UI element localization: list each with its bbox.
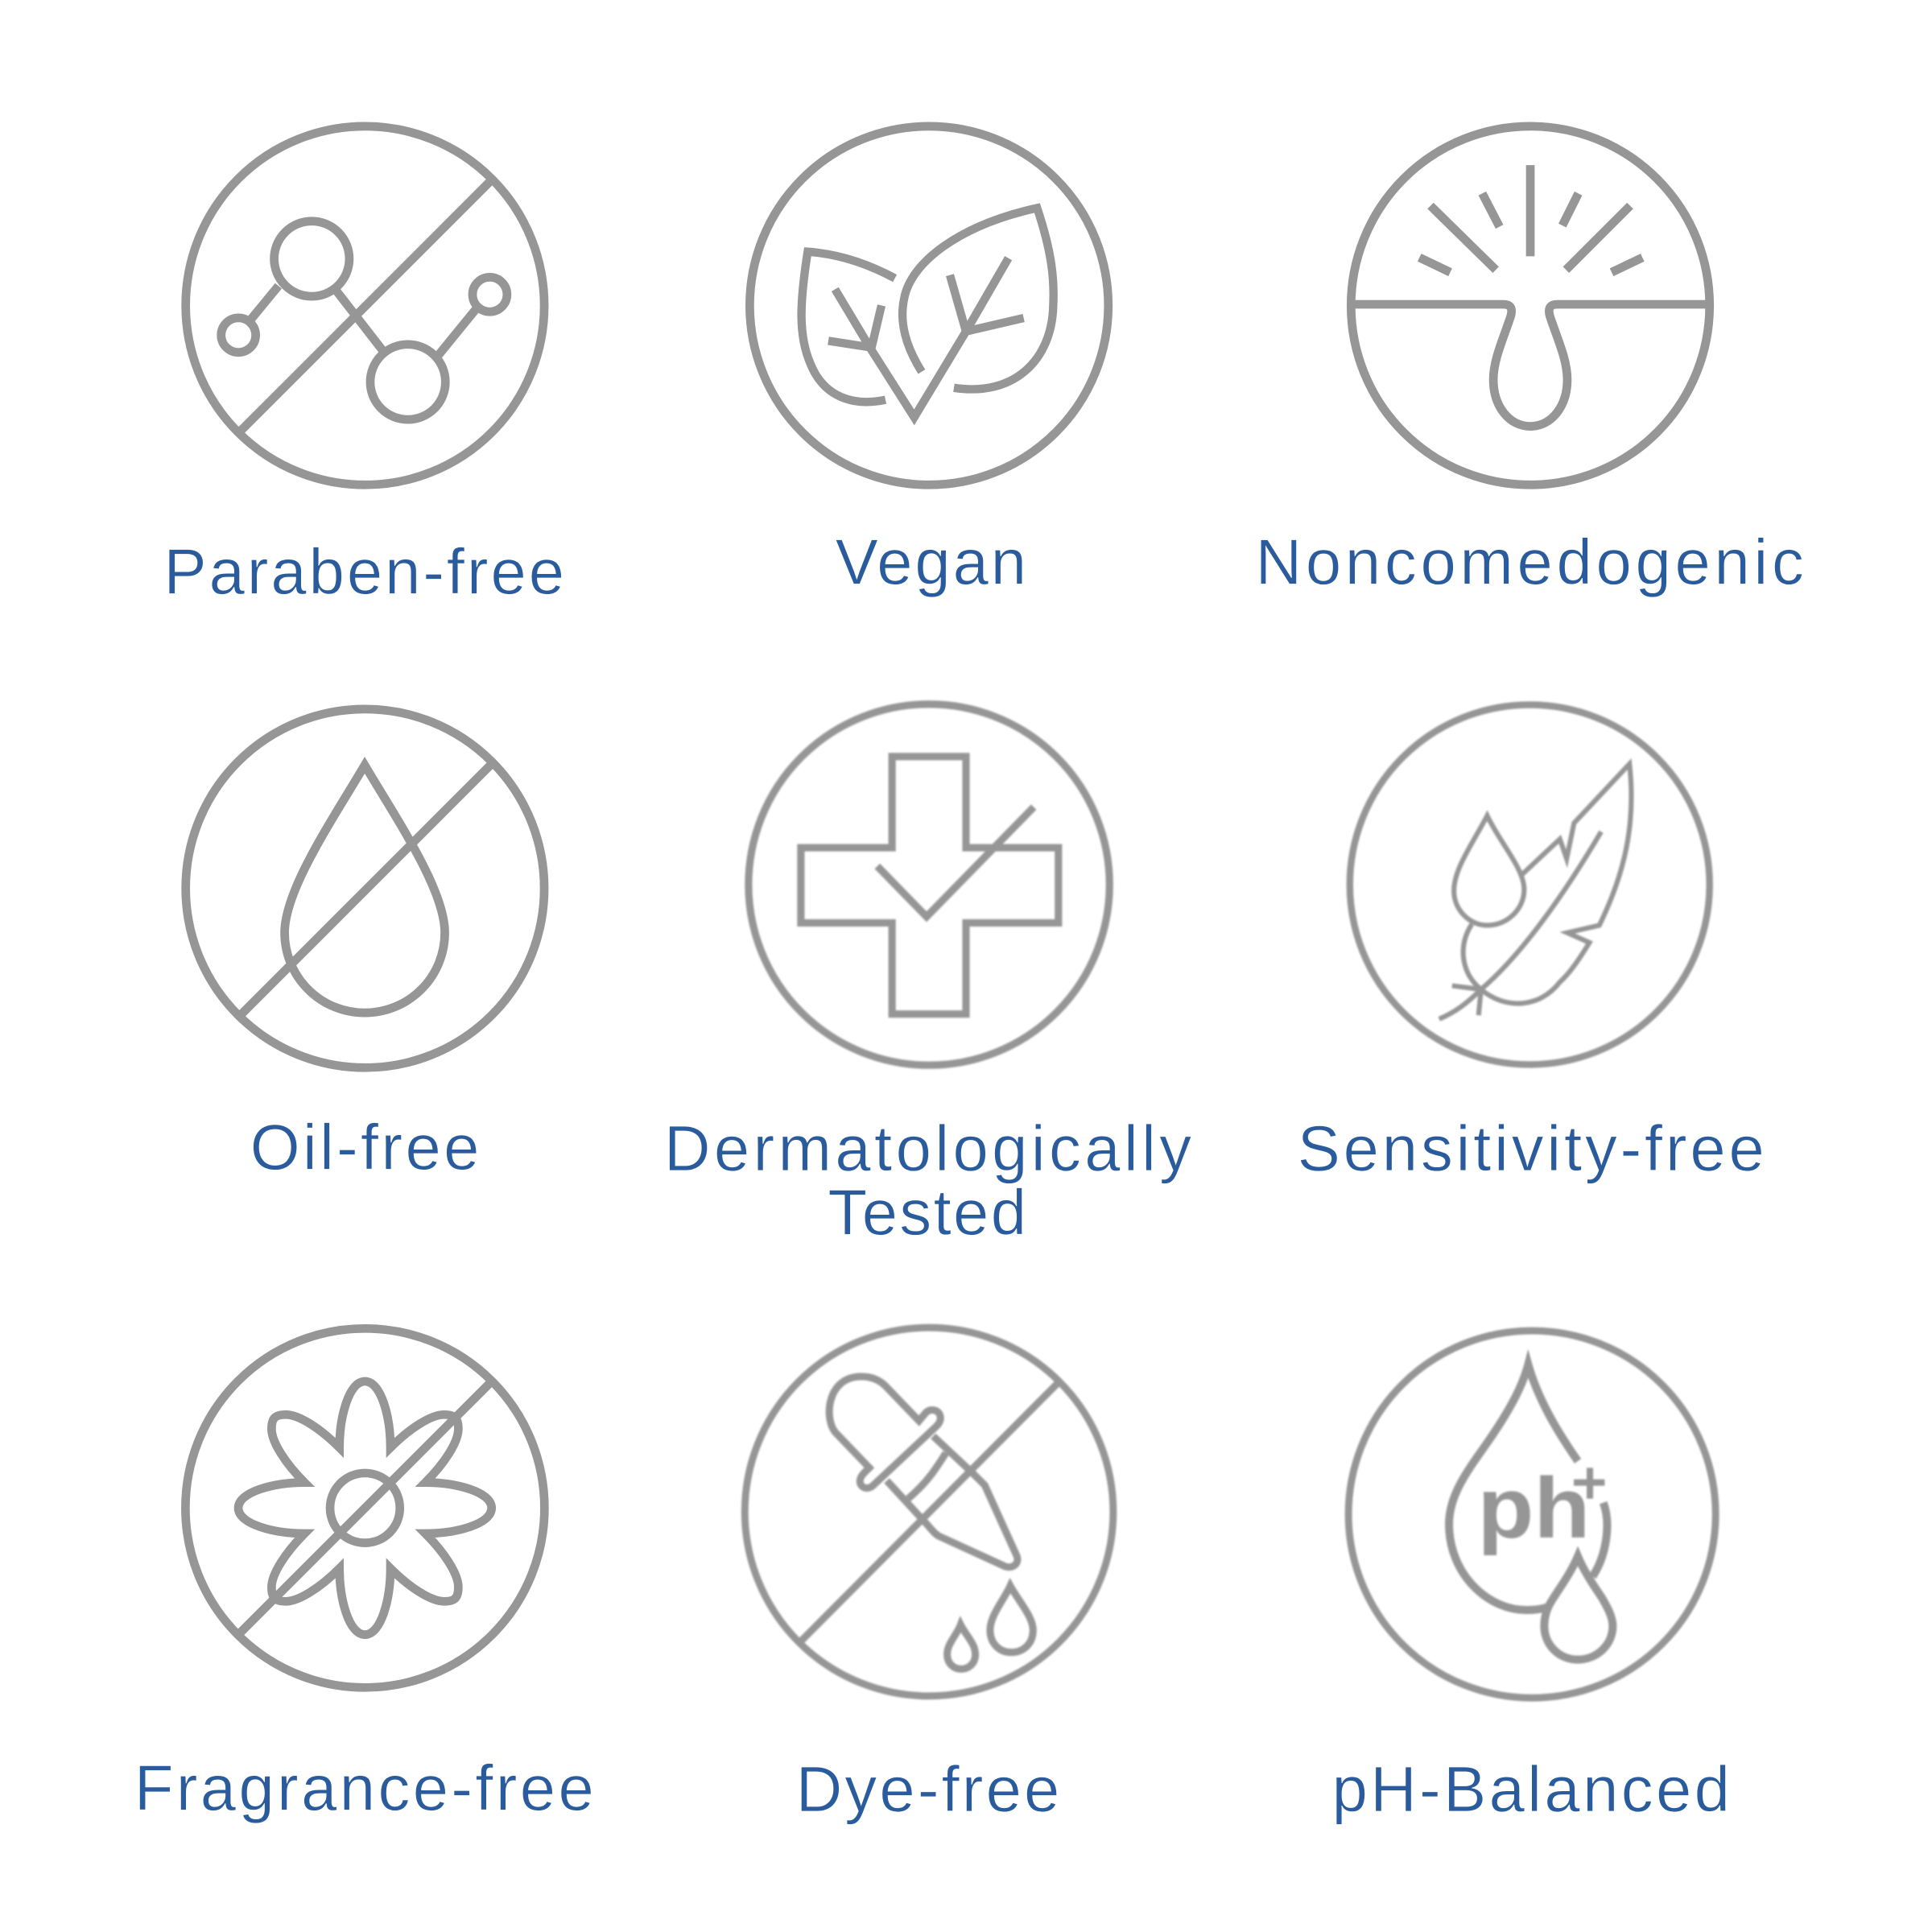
label: Dye-free: Dye-free [796,1753,1059,1825]
label: Vegan: Vegan [836,526,1026,598]
icon: dye-free dropper [745,1327,1113,1696]
icon: vegan leaves [749,126,1108,485]
label: Paraben-free: Paraben-free [164,536,564,608]
label: Sensitivity-free: Sensitivity-free [1298,1113,1765,1184]
label: Dermatologically Tested: Tested [828,1177,1026,1249]
icon: sensitivity-free feather and drop [1350,705,1710,1064]
label: Noncomedogenic: Noncomedogenic [1256,526,1804,598]
icon: noncomedogenic pore [1351,126,1710,485]
label: Dermatologically Tested [664,1113,1191,1249]
icon: dermatologically tested cross [749,704,1109,1065]
icon: pH-balanced drop [1348,1331,1715,1698]
icon: pH-balanced drop: ph [1477,1459,1590,1556]
icon: oil-free drop [186,709,544,1067]
icon: fragrance-free flower [185,1328,544,1687]
label: Oil-free: Oil-free [250,1112,479,1183]
label: Dermatologically Tested: Dermatologically [664,1113,1191,1184]
icon: paraben-free molecule [186,126,544,485]
label: Fragrance-free: Fragrance-free [134,1752,594,1823]
label: pH-Balanced: pH-Balanced [1332,1753,1730,1825]
